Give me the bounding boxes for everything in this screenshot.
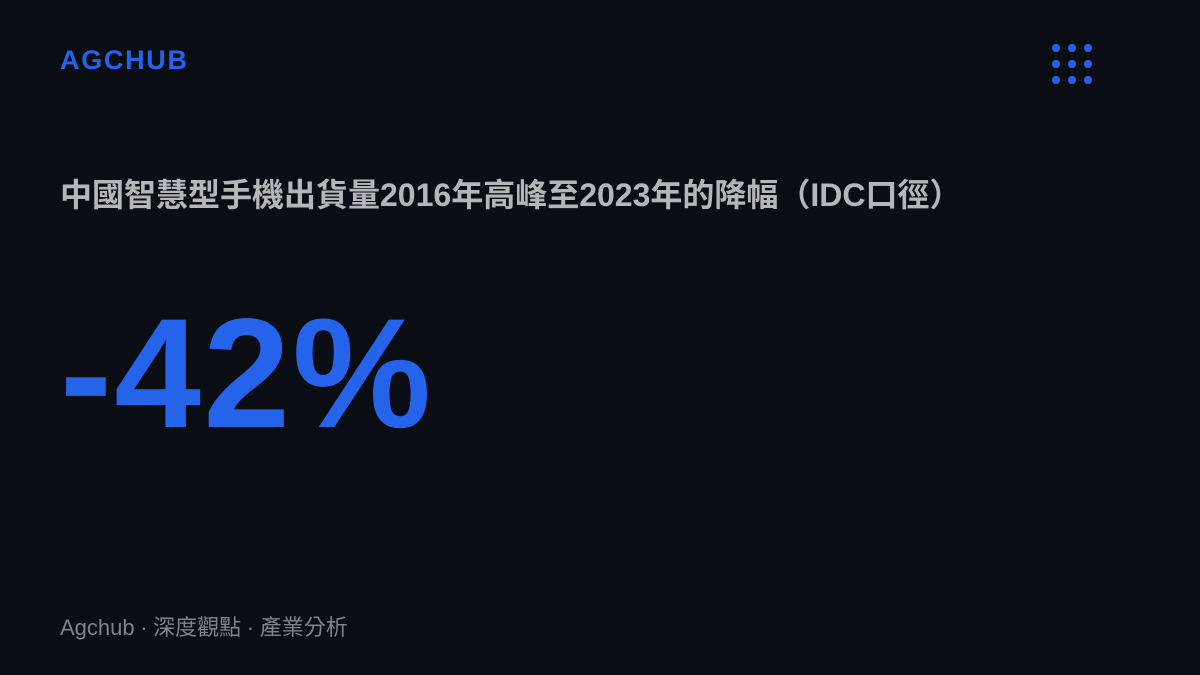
icon: dot grid	[1052, 44, 1092, 84]
big statistic: -42%	[60, 287, 433, 461]
heading: 中國智慧型手機出貨量2016年高峰至2023年的降幅（IDC口徑）	[60, 177, 962, 213]
brand logo text: AGCHUB	[60, 45, 189, 75]
footer text: Agchub · 深度觀點 · 產業分析	[60, 615, 348, 640]
